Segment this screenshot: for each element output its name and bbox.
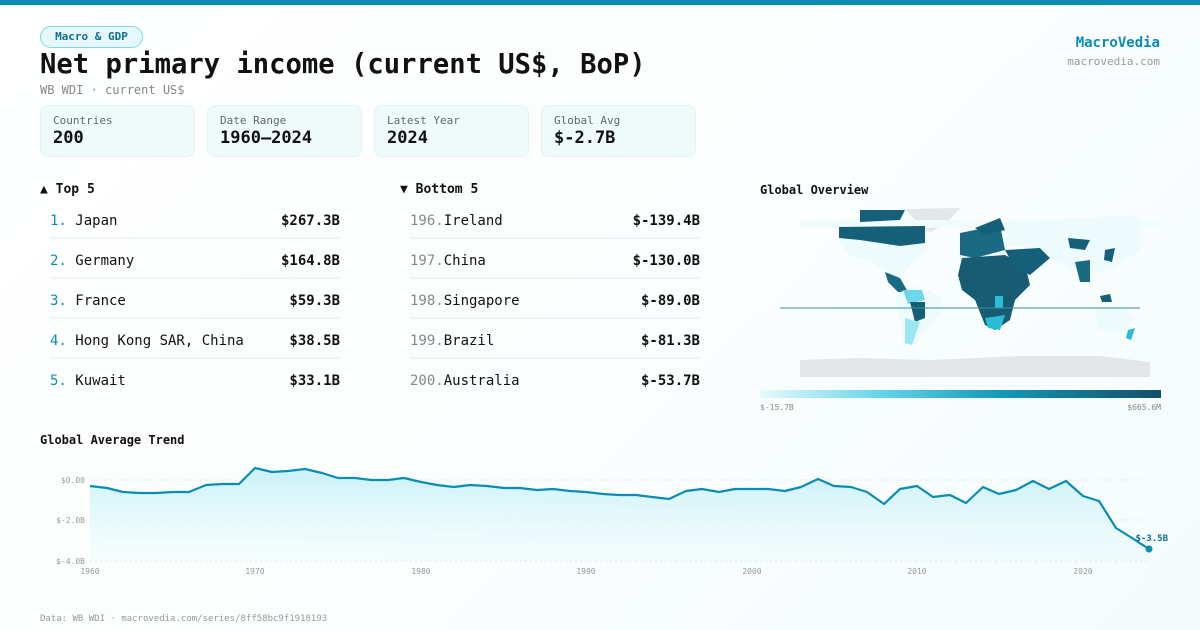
panel: bottom 5: $-81.3B [641,333,700,349]
subtitle: WB WDI · current US$ [40,83,184,97]
line chart: global average trend: 1990 [576,567,596,576]
card: countries: Countries [53,114,113,127]
line chart: global average trend: 2010 [907,567,927,576]
panel: bottom 5: $-130.0B [633,253,700,269]
card: date range: 1960–2024 [220,128,312,148]
world map: $-15.7B [760,403,794,412]
panel: top 5: 4. Hong Kong SAR, China [50,333,244,349]
card: countries: 200 [53,128,84,148]
panel: global overview map [760,183,1161,412]
panel: bottom 5: 199.Brazil [410,333,494,349]
brand [1067,35,1160,68]
line chart: global average trend: 1980 [411,567,431,576]
footer source: Data: WB WDI · macrovedia.com/series/8ff58bc9f1918193 [40,614,327,624]
panel: bottom 5: $-139.4B [633,213,700,229]
panel: top 5: $164.8B [281,253,340,269]
card: countries [40,105,195,157]
heading global overview: Global Overview [760,183,868,197]
card: global avg: Global Avg [554,114,620,127]
panel: bottom 5 [400,182,700,389]
card: latest year: Latest Year [387,114,460,127]
title: Net primary income (current US$, BoP) [40,49,646,80]
panel: bottom 5: 200.Australia [410,373,520,389]
heading bottom 5: ▼ Bottom 5 [400,182,478,197]
world map [760,208,1161,412]
line chart: global average trend: 2000 [742,567,762,576]
card: global avg: $-2.7B [554,128,615,148]
panel: top 5: $38.5B [289,333,340,349]
line chart: global average trend: $-3.5B [1135,534,1169,544]
card: date range: Date Range [220,114,286,127]
card: latest year: 2024 [387,128,428,148]
panel: bottom 5: $-89.0B [641,293,700,309]
stat cards [40,105,696,157]
card: latest year [374,105,529,157]
panel: top 5: 1. Japan [50,213,117,229]
panel: bottom 5: 196.Ireland [410,213,503,229]
world map: $665.6M [1127,403,1161,412]
line chart: global average trend: $-4.0B [56,557,85,566]
brand: MacroVedia [1076,35,1160,51]
brand: macrovedia.com [1067,55,1160,68]
panel: bottom 5: 198.Singapore [410,293,520,309]
panel: top 5: $267.3B [281,213,340,229]
line chart: global average trend: 1960 [80,567,100,576]
line chart: global average trend: $0.00 [61,476,85,485]
heading: global average trend: Global Average Trend [40,433,184,447]
panel: top 5: 2. Germany [50,253,134,269]
tag: Macro & GDP: Macro & GDP [55,30,128,43]
tag: Macro & GDP [40,26,143,48]
heading top 5: ▲ Top 5 [40,182,95,197]
card: date range [207,105,362,157]
line chart: global average trend: 2020 [1073,567,1093,576]
line chart: global average trend: 1970 [245,567,265,576]
line chart: global average trend: $-2.0B [56,516,85,525]
panel: bottom 5: $-53.7B [641,373,700,389]
panel: top 5: 5. Kuwait [50,373,126,389]
panel: top 5: $33.1B [289,373,340,389]
panel: top 5: $59.3B [289,293,340,309]
panel: top 5: 3. France [50,293,126,309]
panel: top 5 [40,182,340,389]
card: global avg [541,105,696,157]
top bar [0,0,1200,5]
panel: bottom 5: 197.China [410,253,486,269]
